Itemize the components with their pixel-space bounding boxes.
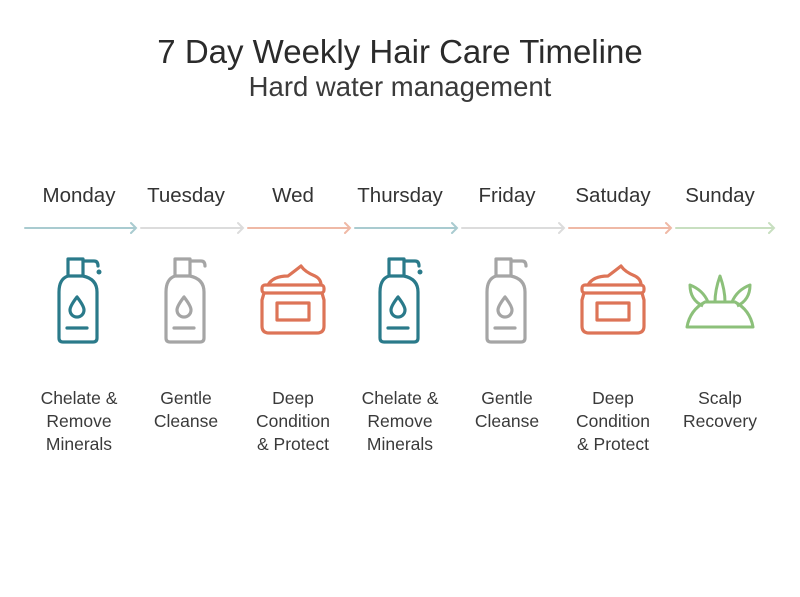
step descriptions: Gentle	[160, 388, 212, 408]
day labels: Friday	[479, 184, 536, 207]
step descriptions: Condition	[576, 411, 650, 431]
step descriptions: Recovery	[683, 411, 757, 431]
icon: gray bottle Tuesday	[166, 259, 205, 342]
step descriptions: Cleanse	[154, 411, 218, 431]
step descriptions: Remove	[367, 411, 433, 431]
subtitle: Hard water management	[249, 71, 551, 102]
icon: teal bottle Thursday	[380, 259, 422, 342]
day labels: Wed	[272, 184, 314, 207]
title: 7 Day Weekly Hair Care Timeline	[157, 33, 643, 70]
icon: jar Saturday	[582, 266, 644, 333]
icon: scalp sprout Sunday	[687, 276, 753, 327]
icon: teal bottle Monday	[59, 259, 102, 342]
step descriptions: Deep	[592, 388, 634, 408]
step descriptions: Cleanse	[475, 411, 539, 431]
step descriptions: Remove	[46, 411, 112, 431]
icon: jar Wednesday	[262, 266, 324, 333]
day labels: Thursday	[357, 184, 443, 207]
step descriptions	[41, 388, 757, 454]
step descriptions: Chelate &	[362, 388, 439, 408]
step descriptions: Minerals	[367, 434, 433, 454]
day labels	[43, 184, 756, 207]
day labels: Tuesday	[147, 184, 226, 207]
step descriptions: Condition	[256, 411, 330, 431]
day labels: Sunday	[685, 184, 756, 207]
arrows	[25, 223, 774, 233]
step descriptions: Minerals	[46, 434, 112, 454]
step descriptions: Chelate &	[41, 388, 118, 408]
step descriptions: & Protect	[577, 434, 649, 454]
step descriptions: Scalp	[698, 388, 742, 408]
step descriptions: Gentle	[481, 388, 533, 408]
day labels: Monday	[43, 184, 116, 207]
step descriptions: Deep	[272, 388, 314, 408]
step descriptions: & Protect	[257, 434, 329, 454]
day labels: Satuday	[575, 184, 651, 207]
icon: gray bottle Friday	[487, 259, 526, 342]
